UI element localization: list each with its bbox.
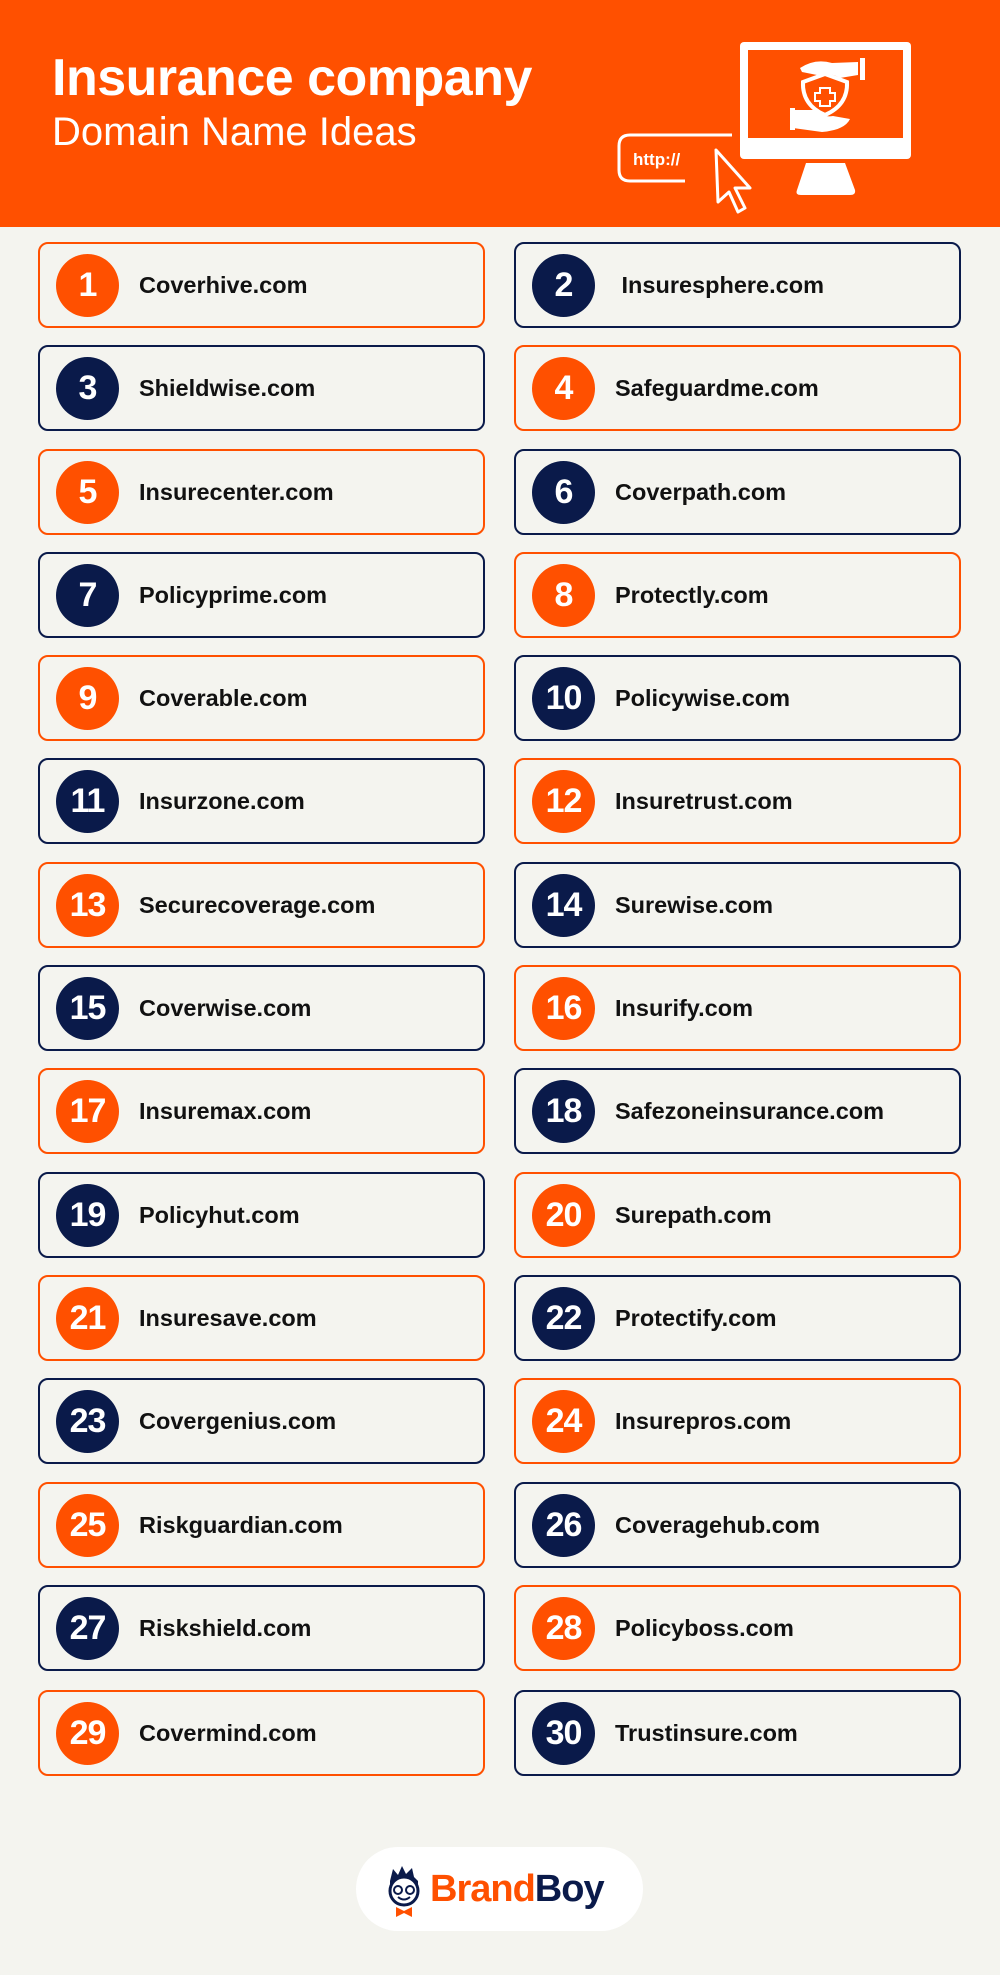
text: Safezoneinsurance.com xyxy=(615,1098,884,1124)
text: Surewise.com xyxy=(615,892,773,918)
text: 27 xyxy=(70,1609,105,1647)
text: Surepath.com xyxy=(615,1202,772,1228)
text: Protectly.com xyxy=(615,582,769,608)
text: Protectify.com xyxy=(615,1305,776,1331)
text: Coverwise.com xyxy=(139,995,311,1021)
text: Covergenius.com xyxy=(139,1408,336,1434)
text: Policyboss.com xyxy=(615,1615,794,1641)
logo text: BrandBoy xyxy=(430,1868,604,1910)
list of domain cards xyxy=(38,242,961,1776)
text: 7 xyxy=(79,576,96,614)
icon: monitor with shield and url: http:// xyxy=(633,150,680,169)
text: 24 xyxy=(546,1402,581,1440)
text: Policyprime.com xyxy=(139,582,327,608)
text: Insurify.com xyxy=(615,995,753,1021)
text: Safeguardme.com xyxy=(615,375,819,401)
text: 8 xyxy=(555,576,572,614)
text: 10 xyxy=(546,679,581,717)
text: Covermind.com xyxy=(139,1720,317,1746)
text: Insurzone.com xyxy=(139,788,305,814)
text: 19 xyxy=(70,1196,105,1234)
text: Insurepros.com xyxy=(615,1408,791,1434)
text: 21 xyxy=(70,1299,105,1337)
text: 23 xyxy=(70,1402,105,1440)
text: 29 xyxy=(70,1714,105,1752)
subtitle: Domain Name Ideas xyxy=(52,110,417,154)
text: 17 xyxy=(70,1092,105,1130)
text: 2 xyxy=(555,266,572,304)
text: 25 xyxy=(70,1506,105,1544)
text: 4 xyxy=(555,369,572,407)
text: 6 xyxy=(555,473,572,511)
text: 3 xyxy=(79,369,96,407)
header banner xyxy=(0,0,1000,227)
text: Coverable.com xyxy=(139,685,307,711)
text: Insuresave.com xyxy=(139,1305,317,1331)
text: Coverpath.com xyxy=(615,479,786,505)
text: Coveragehub.com xyxy=(615,1512,820,1538)
text: Securecoverage.com xyxy=(139,892,375,918)
text: Insuremax.com xyxy=(139,1098,311,1124)
title: Insurance company xyxy=(52,49,532,107)
text: 30 xyxy=(546,1714,581,1752)
text: 16 xyxy=(546,989,581,1027)
icon: boy mascot xyxy=(388,1866,420,1917)
icon: monitor with shield and url xyxy=(618,42,911,214)
text: 1 xyxy=(79,266,96,304)
text: 11 xyxy=(71,782,104,820)
text: 26 xyxy=(546,1506,581,1544)
text: Policyhut.com xyxy=(139,1202,300,1228)
text: 22 xyxy=(546,1299,581,1337)
text: Insuretrust.com xyxy=(615,788,793,814)
text: 18 xyxy=(546,1092,581,1130)
text: Coverhive.com xyxy=(139,272,307,298)
text: Shieldwise.com xyxy=(139,375,315,401)
text: 5 xyxy=(79,473,96,511)
text: 12 xyxy=(546,782,581,820)
text: 28 xyxy=(546,1609,581,1647)
text: Policywise.com xyxy=(615,685,790,711)
footer logo: BrandBoy xyxy=(356,1847,643,1931)
text: 20 xyxy=(546,1196,581,1234)
text: Riskguardian.com xyxy=(139,1512,343,1538)
text: Insuresphere.com xyxy=(622,272,824,298)
text: 15 xyxy=(70,989,105,1027)
text: 14 xyxy=(546,886,581,924)
text: Riskshield.com xyxy=(139,1615,311,1641)
text: 9 xyxy=(79,679,96,717)
text: Trustinsure.com xyxy=(615,1720,798,1746)
text: Insurecenter.com xyxy=(139,479,334,505)
text: 13 xyxy=(70,886,105,924)
